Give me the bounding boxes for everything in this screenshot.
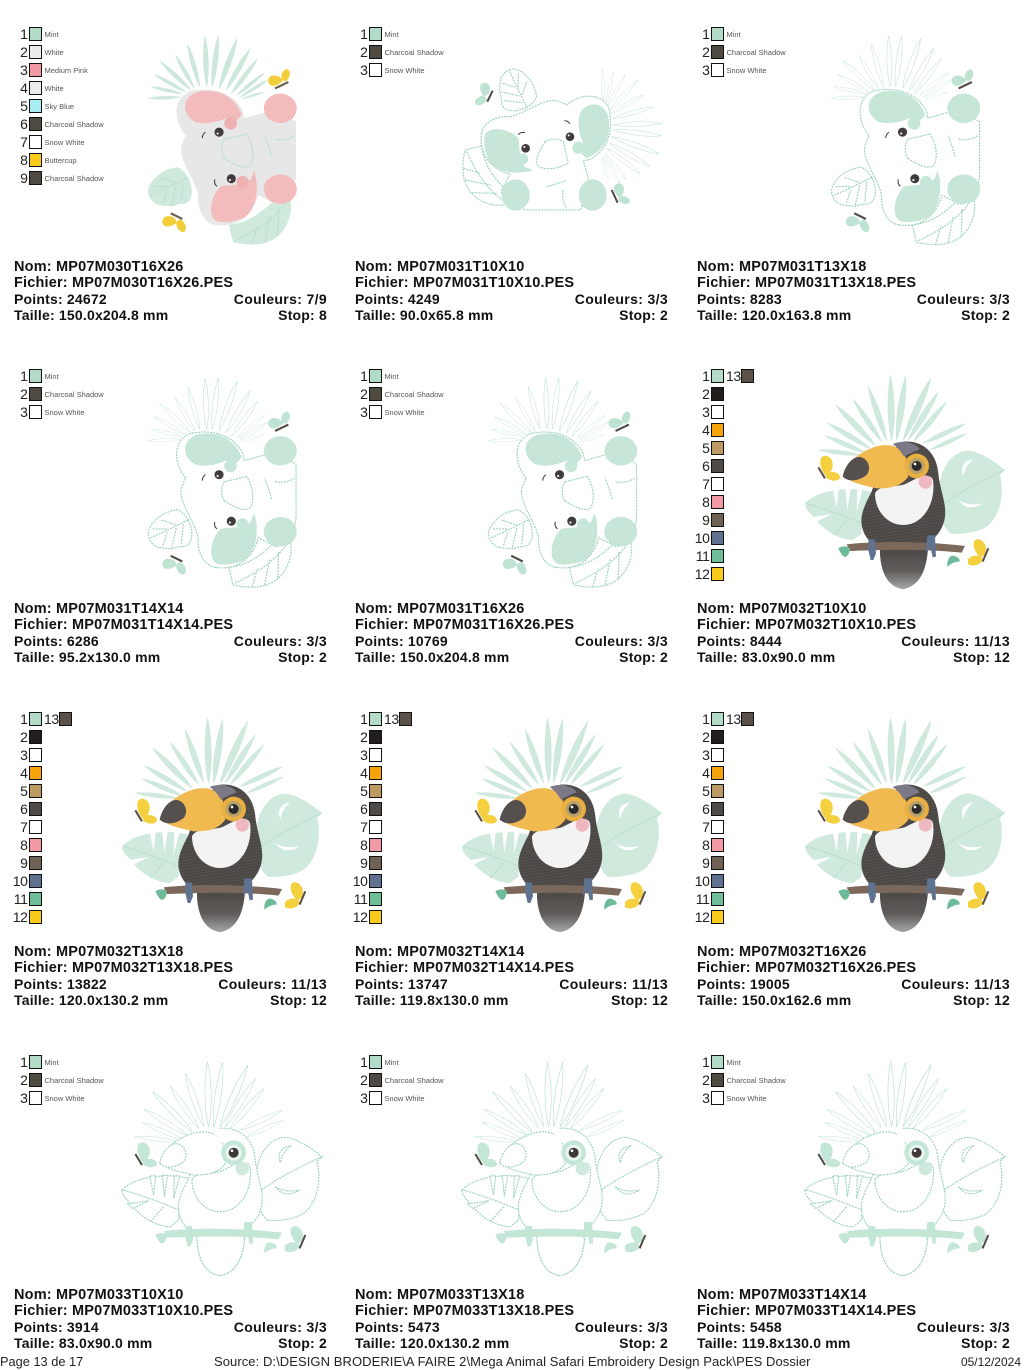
- colour legend: 9: [702, 855, 710, 871]
- colour legend: Snow White: [384, 408, 425, 416]
- design details: Points: 13822: [14, 976, 107, 992]
- design details: [697, 601, 1010, 665]
- design details: Taille: 119.8x130.0 mm: [697, 1335, 851, 1351]
- illustration: outline toucan: [341, 1028, 682, 1286]
- colour legend: 8: [20, 837, 28, 853]
- design details: Taille: 150.0x162.6 mm: [697, 992, 851, 1008]
- colour legend: Charcoal Shadow: [726, 1076, 786, 1084]
- colour legend: Mint: [44, 30, 59, 38]
- colour legend: 2: [360, 386, 368, 402]
- colour legend: 13: [44, 711, 59, 727]
- design details: Nom: MP07M030T16X26: [14, 259, 183, 275]
- design details: [14, 944, 327, 1008]
- design details: Taille: 83.0x90.0 mm: [14, 1335, 152, 1351]
- colour legend: [20, 1054, 104, 1106]
- illustration: colour toucan on branch: [805, 718, 1005, 932]
- colour legend: Snow White: [384, 1094, 425, 1102]
- design details: Points: 24672: [14, 291, 107, 307]
- design details: Couleurs: 11/13: [218, 976, 327, 992]
- colour legend: Snow White: [44, 1094, 85, 1102]
- footer: page number: Page 13 de 17: [0, 1354, 83, 1369]
- colour legend: Charcoal Shadow: [726, 48, 786, 56]
- design details: Stop: 12: [953, 649, 1010, 665]
- colour legend: 7: [360, 819, 368, 835]
- design details: Couleurs: 3/3: [575, 633, 668, 649]
- colour legend: 11: [696, 891, 710, 907]
- colour legend: 1: [360, 711, 368, 727]
- colour legend: 1: [702, 368, 710, 384]
- panel: MP07M032T13X18: [13, 711, 327, 1008]
- colour legend: 3: [702, 62, 710, 78]
- design details: Couleurs: 3/3: [575, 1319, 668, 1335]
- colour legend: Mint: [44, 1058, 59, 1066]
- design details: Stop: 2: [619, 1335, 668, 1351]
- colour legend: 2: [360, 44, 368, 60]
- colour legend: 11: [14, 891, 28, 907]
- design details: Fichier: MP07M031T16X26.PES: [355, 617, 574, 633]
- colour legend: Buttercup: [44, 156, 77, 164]
- colour legend: [360, 26, 444, 78]
- colour legend: 10: [13, 873, 28, 889]
- illustration: outline elephant: [462, 68, 662, 211]
- design details: Taille: 150.0x204.8 mm: [355, 649, 509, 665]
- design details: [14, 259, 327, 323]
- design details: Stop: 12: [270, 992, 327, 1008]
- panel: MP07M032T14X14: [353, 711, 668, 1008]
- colour legend: Charcoal Shadow: [44, 1076, 104, 1084]
- panel: MP07M032T10X10: [695, 368, 1010, 665]
- design details: [355, 944, 668, 1008]
- panel: MP07M033T14X14: [683, 1028, 1024, 1370]
- colour legend: 12: [353, 909, 368, 925]
- design details: Taille: 120.0x163.8 mm: [697, 307, 851, 323]
- panel: MP07M033T13X18: [341, 1028, 682, 1370]
- design details: Stop: 2: [961, 307, 1010, 323]
- design details: Nom: MP07M031T10X10: [355, 259, 524, 275]
- colour legend: 13: [726, 368, 741, 384]
- colour legend: 1: [20, 368, 28, 384]
- colour legend: 13: [726, 711, 741, 727]
- colour legend: 3: [20, 747, 28, 763]
- colour legend: 11: [354, 891, 368, 907]
- colour legend: 1: [20, 1054, 28, 1070]
- colour legend: 8: [20, 152, 28, 168]
- colour legend: Snow White: [44, 408, 85, 416]
- colour legend: 3: [360, 62, 368, 78]
- colour legend: [341, 1053, 444, 1107]
- colour legend: 2: [360, 1072, 368, 1088]
- colour legend: 3: [20, 404, 28, 420]
- colour legend: 5: [702, 440, 710, 456]
- colour legend: [360, 368, 444, 420]
- colour legend: 8: [702, 494, 710, 510]
- colour legend: 12: [13, 909, 28, 925]
- design details: Nom: MP07M031T16X26: [355, 601, 524, 617]
- colour legend: 9: [20, 855, 28, 871]
- colour legend: Mint: [384, 1058, 399, 1066]
- colour legend: 3: [702, 404, 710, 420]
- colour legend: 7: [20, 819, 28, 835]
- colour legend: 10: [353, 873, 368, 889]
- colour legend: 5: [20, 98, 28, 114]
- design details: [14, 1287, 327, 1351]
- colour legend: Medium Pink: [44, 66, 88, 74]
- colour legend: Charcoal Shadow: [44, 120, 104, 128]
- colour legend: 1: [20, 711, 28, 727]
- design details: Fichier: MP07M032T16X26.PES: [697, 960, 916, 976]
- design details: Couleurs: 7/9: [234, 291, 327, 307]
- design details: Taille: 95.2x130.0 mm: [14, 649, 160, 665]
- colour legend: 2: [702, 729, 710, 745]
- colour legend: White: [44, 48, 64, 56]
- colour legend: Charcoal Shadow: [44, 174, 104, 182]
- design details: Nom: MP07M033T14X14: [697, 1287, 866, 1303]
- panel: MP07M030T16X26: [14, 26, 327, 323]
- design details: Nom: MP07M033T13X18: [355, 1287, 524, 1303]
- colour legend: 2: [360, 729, 368, 745]
- colour legend: [20, 26, 104, 186]
- design details: [697, 259, 1010, 323]
- colour legend: 5: [360, 783, 368, 799]
- design details: Fichier: MP07M030T16X26.PES: [14, 275, 233, 291]
- design details: Couleurs: 3/3: [575, 291, 668, 307]
- design details: Nom: MP07M033T10X10: [14, 1287, 183, 1303]
- colour legend: 4: [360, 765, 368, 781]
- colour legend: [683, 1053, 786, 1107]
- design details: Stop: 2: [278, 1335, 327, 1351]
- colour legend: 6: [702, 801, 710, 817]
- colour legend: Charcoal Shadow: [384, 1076, 444, 1084]
- colour legend: 12: [695, 566, 710, 582]
- colour legend: 3: [702, 1090, 710, 1106]
- design details: [14, 601, 327, 665]
- colour legend: Snow White: [384, 66, 425, 74]
- design details: Taille: 90.0x65.8 mm: [355, 307, 493, 323]
- colour legend: Snow White: [44, 138, 85, 146]
- panel: MP07M033T10X10: [14, 1054, 327, 1351]
- design details: Fichier: MP07M032T14X14.PES: [355, 960, 574, 976]
- design details: Points: 5458: [697, 1319, 782, 1335]
- illustration: outline elephant rotated: [831, 36, 980, 246]
- colour legend: 1: [360, 26, 368, 42]
- colour legend: Snow White: [726, 66, 767, 74]
- colour legend: 2: [702, 386, 710, 402]
- illustration: colour toucan on branch: [462, 718, 662, 932]
- colour legend: Mint: [44, 372, 59, 380]
- design details: Fichier: MP07M032T13X18.PES: [14, 960, 233, 976]
- panel: MP07M031T14X14: [14, 368, 327, 665]
- colour legend: 3: [360, 747, 368, 763]
- design details: Points: 8444: [697, 633, 782, 649]
- colour legend: Sky Blue: [44, 102, 74, 110]
- design details: Couleurs: 11/13: [901, 633, 1010, 649]
- design details: Nom: MP07M032T16X26: [697, 944, 866, 960]
- design details: Nom: MP07M032T10X10: [697, 601, 866, 617]
- colour legend: 4: [20, 80, 28, 96]
- colour legend: 2: [20, 386, 28, 402]
- design details: Taille: 83.0x90.0 mm: [697, 649, 835, 665]
- colour legend: 7: [702, 819, 710, 835]
- design details: Couleurs: 3/3: [917, 1319, 1010, 1335]
- design details: Nom: MP07M031T13X18: [697, 259, 866, 275]
- colour legend: 9: [20, 170, 28, 186]
- design details: Fichier: MP07M031T10X10.PES: [355, 275, 574, 291]
- colour legend: Mint: [726, 30, 741, 38]
- design details: Fichier: MP07M033T13X18.PES: [355, 1303, 574, 1319]
- illustration: colour toucan on branch: [805, 375, 1005, 589]
- design details: Points: 8283: [697, 291, 782, 307]
- colour legend: 10: [695, 530, 710, 546]
- colour legend: Charcoal Shadow: [384, 390, 444, 398]
- design details: Fichier: MP07M033T14X14.PES: [697, 1303, 916, 1319]
- design details: Taille: 150.0x204.8 mm: [14, 307, 168, 323]
- illustration: outline toucan: [683, 1028, 1024, 1286]
- colour legend: White: [44, 84, 64, 92]
- colour legend: 2: [20, 1072, 28, 1088]
- design details: Stop: 2: [619, 649, 668, 665]
- design details: Couleurs: 3/3: [234, 1319, 327, 1335]
- colour legend: 3: [360, 404, 368, 420]
- colour legend: 6: [360, 801, 368, 817]
- colour legend: 9: [702, 512, 710, 528]
- colour legend: [353, 711, 412, 925]
- design details: Couleurs: 3/3: [234, 633, 327, 649]
- colour legend: 11: [696, 548, 710, 564]
- panel: MP07M032T16X26: [695, 711, 1010, 1008]
- colour legend: [702, 26, 786, 78]
- colour legend: [695, 711, 754, 925]
- colour legend: Charcoal Shadow: [44, 390, 104, 398]
- panel: MP07M031T10X10: [355, 26, 668, 323]
- colour legend: 12: [695, 909, 710, 925]
- colour legend: Snow White: [726, 1094, 767, 1102]
- colour legend: 2: [702, 1072, 710, 1088]
- design details: [697, 1287, 1010, 1351]
- design details: Stop: 12: [953, 992, 1010, 1008]
- colour legend: 8: [360, 837, 368, 853]
- colour legend: 7: [20, 134, 28, 150]
- design details: Fichier: MP07M031T13X18.PES: [697, 275, 916, 291]
- colour legend: 1: [360, 1054, 368, 1070]
- design details: [697, 944, 1010, 1008]
- illustration: pink elephant with palm leaves: [148, 36, 297, 245]
- colour legend: 1: [20, 26, 28, 42]
- design details: [355, 259, 668, 323]
- design details: [355, 601, 668, 665]
- colour legend: 1: [702, 1054, 710, 1070]
- design details: Stop: 12: [611, 992, 668, 1008]
- design details: Nom: MP07M032T13X18: [14, 944, 183, 960]
- colour legend: 9: [360, 855, 368, 871]
- colour legend: 10: [695, 873, 710, 889]
- design details: Stop: 8: [278, 307, 327, 323]
- design details: Taille: 120.0x130.2 mm: [355, 1335, 509, 1351]
- design details: Stop: 2: [278, 649, 327, 665]
- design details: Nom: MP07M031T14X14: [14, 601, 183, 617]
- design details: Points: 10769: [355, 633, 448, 649]
- design details: Fichier: MP07M032T10X10.PES: [697, 617, 916, 633]
- design details: [355, 1287, 668, 1351]
- panel: MP07M031T16X26: [355, 368, 668, 665]
- design details: Stop: 2: [961, 1335, 1010, 1351]
- colour legend: Charcoal Shadow: [384, 48, 444, 56]
- illustration: colour toucan on branch: [122, 718, 322, 932]
- footer: date: 05/12/2024: [961, 1355, 1021, 1369]
- colour legend: [695, 368, 754, 582]
- colour legend: Mint: [384, 30, 399, 38]
- design details: Couleurs: 11/13: [901, 976, 1010, 992]
- colour legend: 6: [20, 801, 28, 817]
- colour legend: 4: [702, 765, 710, 781]
- colour legend: [13, 711, 72, 925]
- design details: Fichier: MP07M031T14X14.PES: [14, 617, 233, 633]
- colour legend: 13: [384, 711, 399, 727]
- colour legend: 5: [702, 783, 710, 799]
- colour legend: 4: [20, 765, 28, 781]
- design details: Stop: 2: [619, 307, 668, 323]
- design details: Fichier: MP07M033T10X10.PES: [14, 1303, 233, 1319]
- colour legend: 2: [20, 729, 28, 745]
- illustration: outline elephant rotated: [148, 378, 297, 588]
- panel: MP07M031T13X18: [697, 26, 1010, 323]
- colour legend: 3: [20, 62, 28, 78]
- design details: Taille: 119.8x130.0 mm: [355, 992, 509, 1008]
- design details: Points: 6286: [14, 633, 99, 649]
- design details: Couleurs: 11/13: [559, 976, 668, 992]
- colour legend: [20, 368, 104, 420]
- colour legend: 1: [360, 368, 368, 384]
- design details: Points: 19005: [697, 976, 790, 992]
- colour legend: 2: [702, 44, 710, 60]
- colour legend: 6: [20, 116, 28, 132]
- design details: Points: 3914: [14, 1319, 99, 1335]
- illustration: outline elephant rotated: [488, 378, 638, 588]
- colour legend: 5: [20, 783, 28, 799]
- colour legend: 8: [702, 837, 710, 853]
- illustration: outline toucan: [121, 1062, 323, 1276]
- footer: source path: Source: D:\DESIGN BRODERIE\A FAIRE 2\Mega Animal Safari Embroidery Design Pack\PES Dossier: [214, 1354, 811, 1369]
- colour legend: 2: [20, 44, 28, 60]
- design details: Points: 4249: [355, 291, 440, 307]
- colour legend: 3: [702, 747, 710, 763]
- colour legend: 3: [20, 1090, 28, 1106]
- design details: Taille: 120.0x130.2 mm: [14, 992, 168, 1008]
- design details: Nom: MP07M032T14X14: [355, 944, 524, 960]
- colour legend: 3: [360, 1090, 368, 1106]
- colour legend: Mint: [384, 372, 399, 380]
- design details: Points: 5473: [355, 1319, 440, 1335]
- colour legend: 4: [702, 422, 710, 438]
- colour legend: 1: [702, 26, 710, 42]
- design details: Points: 13747: [355, 976, 448, 992]
- colour legend: 7: [702, 476, 710, 492]
- design details: Couleurs: 3/3: [917, 291, 1010, 307]
- colour legend: Mint: [726, 1058, 741, 1066]
- colour legend: 6: [702, 458, 710, 474]
- colour legend: 1: [702, 711, 710, 727]
